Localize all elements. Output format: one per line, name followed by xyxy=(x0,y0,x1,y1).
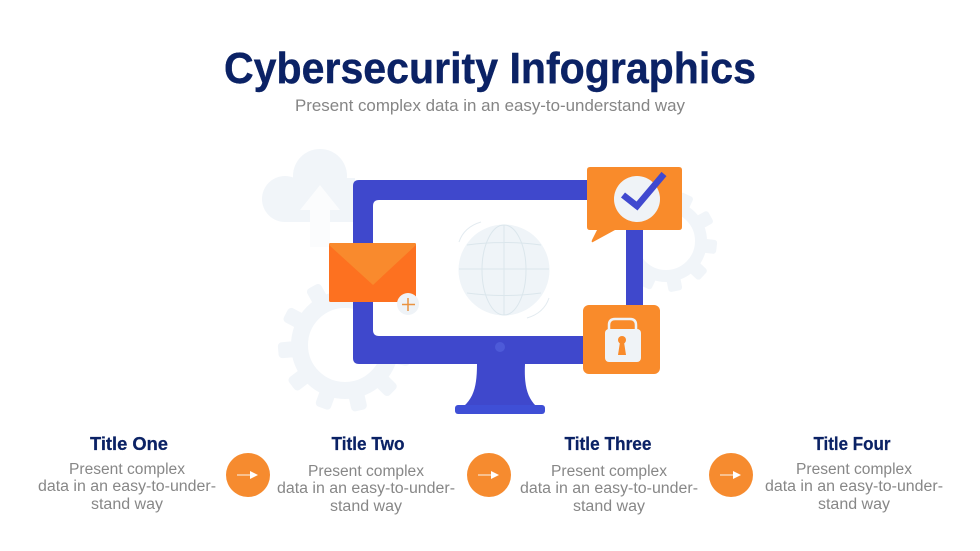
subtitle: Present complex data in an easy-to-understand way xyxy=(295,96,685,115)
step 4: Title Four: Present complex xyxy=(796,461,912,478)
monitor xyxy=(353,180,643,414)
step 4: Title Four: stand way xyxy=(818,496,890,513)
step 2: Title Two: Title Two xyxy=(332,433,404,454)
icon: globe xyxy=(458,222,550,318)
arrow 1 xyxy=(226,453,270,497)
title: Cybersecurity Infographics xyxy=(224,44,756,93)
arrow 3 xyxy=(709,453,753,497)
step 3: Title Three: stand way xyxy=(573,498,645,515)
icon: envelope xyxy=(329,243,416,302)
step 1: Title One: stand way xyxy=(91,496,163,513)
icon: check speech bubble xyxy=(587,167,682,242)
step 4: Title Four xyxy=(765,433,943,513)
illustration: cybersecurity monitor xyxy=(262,149,717,414)
step 1: Title One: data in an easy-to-under- xyxy=(38,478,216,495)
step 1: Title One xyxy=(38,433,216,513)
step 2: Title Two xyxy=(277,433,455,515)
step 1: Title One: Present complex xyxy=(69,461,185,478)
step 1: Title One: Title One xyxy=(90,433,168,454)
step 3: Title Three: Title Three xyxy=(564,433,652,454)
step 2: Title Two: data in an easy-to-under- xyxy=(277,480,455,497)
icon: left gear xyxy=(278,278,412,412)
step 3: Title Three: Present complex xyxy=(551,463,667,480)
arrow 2 xyxy=(467,453,511,497)
icon: background cloud with upload arrow xyxy=(262,149,355,247)
icon: plus badge xyxy=(397,293,419,315)
icon: right gear xyxy=(618,190,717,292)
step 3: Title Three xyxy=(520,433,698,515)
step 4: Title Four: Title Four xyxy=(814,433,890,454)
step 3: Title Three: data in an easy-to-under- xyxy=(520,480,698,497)
step 2: Title Two: Present complex xyxy=(308,463,424,480)
step 4: Title Four: data in an easy-to-under- xyxy=(765,478,943,495)
step 2: Title Two: stand way xyxy=(330,498,402,515)
icon: padlock xyxy=(583,305,660,374)
